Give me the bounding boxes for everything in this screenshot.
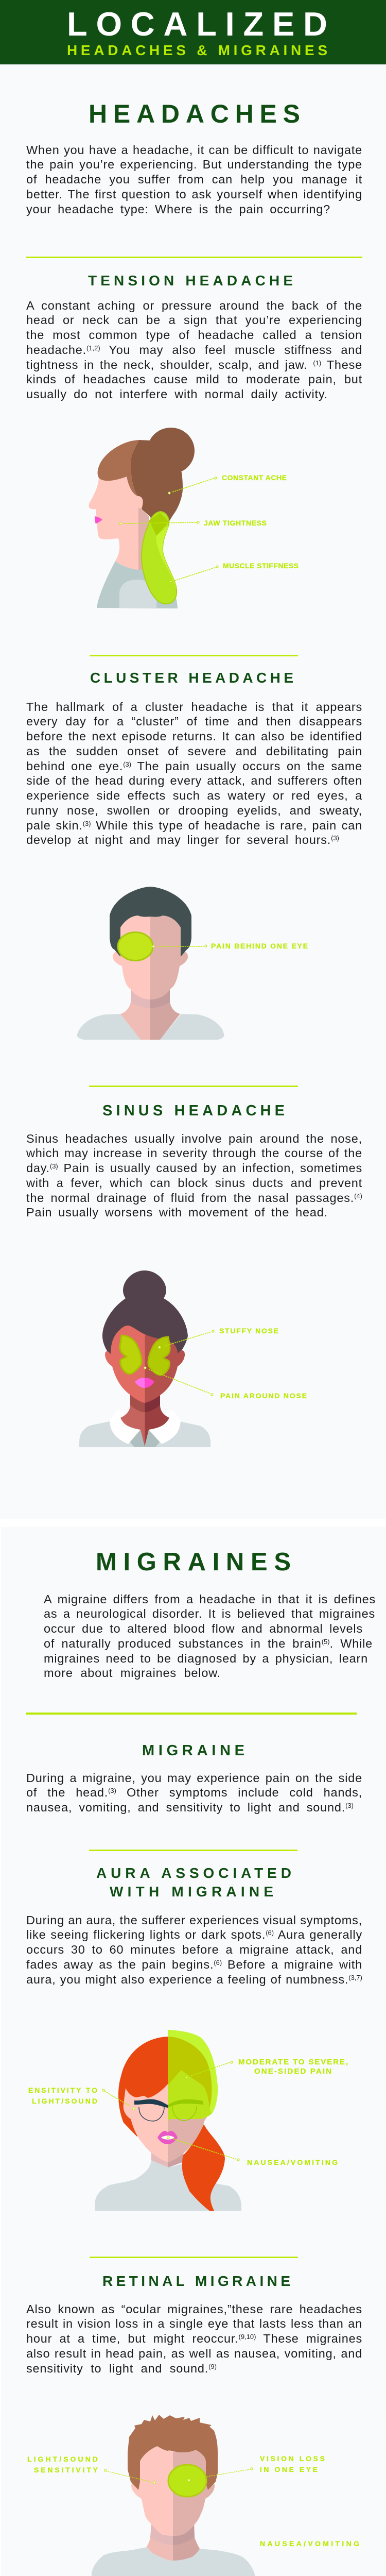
illustration: cluster headache man <box>77 887 308 1040</box>
glasses left <box>134 2099 168 2121</box>
text: aura: fades away as the pain begins.(6) Before a migraine with <box>26 1958 362 1971</box>
hair <box>131 428 195 536</box>
text: headaches intro: the pain you’re experiencing. But understanding the type <box>26 158 362 171</box>
glasses under pain area <box>168 2099 203 2121</box>
callout: sensitivity to light and sound: ENSITIVITY TO <box>28 2086 97 2094</box>
front hair <box>98 440 139 496</box>
shirt <box>97 561 178 608</box>
text: tension headache: A constant aching or pressure around the back of the <box>26 299 362 312</box>
text: migraines intro <box>44 1592 376 1680</box>
text: cluster headache: runny nose, swollen or drooping eyelids, and sweaty, <box>26 804 362 817</box>
text: sinus headache: Sinus headaches usually involve pain around the nose, <box>26 1132 362 1145</box>
illustration: retinal migraine man <box>27 2415 359 2576</box>
pain area: sinuses <box>120 1335 170 1375</box>
text: migraines intro: A migraine differs from a headache in that it is defines <box>44 1592 376 1606</box>
title banner <box>0 0 386 64</box>
face <box>124 2081 212 2162</box>
text: aura <box>26 1913 362 1986</box>
text: cluster headache: every day for a “cluster” of time and then disappears <box>26 715 362 728</box>
text: cluster headache <box>26 700 362 846</box>
text: retinal migraine: Also known as “ocular migraines,”these rare headaches <box>26 2302 362 2316</box>
text: cluster headache: behind one eye.(3) The pain usually occurs on the same <box>26 759 362 773</box>
callout: nausea and vomiting: NAUSEA/VOMITING <box>247 2158 338 2166</box>
pain area: one eye <box>168 2465 206 2497</box>
text: retinal migraine <box>26 2302 362 2375</box>
shirt <box>77 1014 224 1040</box>
text: aura: aura, you might also experience a feeling of numbness.(3,7) <box>26 1973 362 1986</box>
divider and heading: aura associated with migraine <box>89 1850 297 1899</box>
title banner: HEADACHES & MIGRAINES <box>67 42 327 58</box>
text: sinus headache: day.(3) Pain is usually caused by an infection, sometimes <box>26 1161 362 1175</box>
callout: light and sound sensitivity: SENSITIVITY <box>34 2466 98 2474</box>
title banner: LOCALIZED <box>67 5 327 43</box>
text: aura: occurs 30 to 60 minutes before a migraine attack, and <box>26 1943 362 1956</box>
shirt <box>79 1421 210 1447</box>
text: retinal migraine: result in vision loss in a single eye that lasts less than an <box>26 2317 362 2330</box>
text: migraines intro: migraines need to be diagnosed by a physician, learn <box>44 1652 368 1665</box>
callout: jaw tightness <box>119 519 267 527</box>
text: cluster headache: The hallmark of a cluster headache is that it appears <box>26 700 362 714</box>
pain area: one-sided head <box>168 2030 218 2122</box>
callout: vision loss in one eye: VISION LOSS <box>260 2454 325 2463</box>
callout: stuffy nose: STUFFY NOSE <box>219 1327 278 1335</box>
callout: muscle stiffness <box>170 562 299 582</box>
text: retinal migraine: sensitivity to light and sound.(9) <box>26 2362 217 2375</box>
divider and heading: cluster headache <box>90 655 298 685</box>
text: sinus headache <box>26 1132 362 1219</box>
text: tension headache <box>26 299 362 401</box>
neck <box>151 2153 184 2167</box>
ponytail <box>182 2124 225 2211</box>
text: tension headache: usually do not interfere with normal daily activity. <box>26 387 328 401</box>
collar <box>110 1410 181 1444</box>
neck <box>120 987 180 1040</box>
heading: headaches: HEADACHES <box>89 99 300 128</box>
pain area: neck muscle <box>142 512 177 604</box>
callout: light and sound sensitivity <box>27 2455 155 2484</box>
text: cluster headache: experience side effects such as watery or red eyes, a <box>26 789 362 802</box>
callout: vision loss in one eye <box>188 2454 325 2481</box>
callout: vision loss in one eye: IN ONE EYE <box>260 2465 318 2473</box>
text: tension headache: kinds of headaches cause mild to moderate pain, but <box>26 372 362 386</box>
back hair left <box>118 2037 168 2137</box>
divider and heading: aura associated with migraine: AURA ASSOCIATED <box>96 1865 291 1881</box>
hair <box>110 887 191 957</box>
lips <box>135 1378 154 1388</box>
callout: light and sound sensitivity: LIGHT/SOUND <box>27 2455 98 2463</box>
text: tension headache: headache.(1,2) You may also feel muscle stiffness and <box>26 343 362 357</box>
shirt <box>95 2160 241 2211</box>
text: cluster headache: as the sudden onset of severe and debilitating pain <box>26 744 362 758</box>
face <box>105 1326 185 1403</box>
callout: pain around nose <box>144 1367 307 1400</box>
text: headaches intro: better. The first question to ask yourself when identifying <box>26 188 362 201</box>
text: sinus headache: the normal drainage of fluid from the nasal passages.(4) <box>26 1191 362 1205</box>
shirt <box>92 2547 255 2576</box>
text: migraines intro: as a neurological disorder. It is believed that migraines <box>44 1607 375 1620</box>
text: cluster headache: side of the head during every attack, and sufferers often <box>26 774 362 787</box>
callout: constant ache <box>168 473 287 494</box>
callout: nausea and vomiting <box>167 2137 338 2166</box>
face <box>131 2446 215 2536</box>
text: aura: During an aura, the sufferer experiences visual symptoms, <box>26 1913 362 1927</box>
lips <box>95 516 102 524</box>
neck <box>120 1391 169 1446</box>
text: headaches intro <box>26 143 362 216</box>
text: sinus headache: with a fever, which can block sinus ducts and prevent <box>26 1176 362 1190</box>
callout: moderate to severe one-sided pain <box>186 2058 348 2078</box>
callout: constant ache: CONSTANT ACHE <box>222 473 287 482</box>
text: migraine <box>26 1771 362 1814</box>
text: migraines intro: more about migraines below. <box>44 1666 221 1680</box>
text: aura: like seeing flickering lights or dark spots.(6) Aura generally <box>26 1928 362 1941</box>
text: cluster headache: pale skin.(3) While this type of headache is rare, pain can <box>26 819 362 832</box>
text: tension headache: tightness in the neck, shoulder, scalp, and jaw. (1) These <box>26 358 362 371</box>
callout: pain behind one eye <box>152 942 308 950</box>
text: tension headache: the most common type of headache called a tension <box>26 328 362 342</box>
front hair left <box>126 2061 168 2098</box>
divider and heading: migraine <box>26 1713 357 1758</box>
text: retinal migraine: hour at a time, but might reoccur.(9,10) These migraines <box>26 2332 362 2345</box>
face <box>113 916 188 999</box>
hair <box>128 2415 218 2490</box>
divider and heading: tension headache: TENSION HEADACHE <box>88 273 293 289</box>
text: migraine: nausea, vomiting, and sensitivity to light and sound.(3) <box>26 1801 354 1814</box>
illustration: aura woman <box>28 2030 348 2211</box>
callout: pain around nose: PAIN AROUND NOSE <box>220 1392 307 1400</box>
text: sinus headache: which may increase in severity through the course of the <box>26 1146 362 1160</box>
callout: sensitivity to light and sound: LIGHT/SOUND <box>32 2097 97 2105</box>
text: headaches intro: of headache you suffer from can help you manage it <box>26 173 362 186</box>
text: retinal migraine: also result in head pain, as well as nausea, vomiting, and <box>26 2347 362 2360</box>
white strip and left margin <box>0 1519 386 2576</box>
callout: sensitivity to light and sound <box>28 2086 135 2110</box>
callout: moderate to severe one-sided pain: ONE-SIDED PAIN <box>254 2067 331 2076</box>
divider and heading: tension headache <box>26 257 362 289</box>
text: migraines intro: occur due to altered blood flow and abnormal levels <box>44 1622 363 1635</box>
pain area: one eye <box>118 933 153 960</box>
text: cluster headache: develop at night and may linger for several hours.(3) <box>26 833 339 846</box>
text: migraine: During a migraine, you may experience pain on the side <box>26 1771 362 1785</box>
text: headaches intro: your headache type: Where is the pain occurring? <box>26 202 330 216</box>
text: migraines intro: of naturally produced substances in the brain(5). While <box>44 1637 373 1650</box>
face and neck <box>89 477 149 570</box>
divider and heading: retinal migraine <box>90 2257 298 2289</box>
callout: pain behind one eye: PAIN BEHIND ONE EYE <box>211 942 308 950</box>
text: migraine: of the head.(3) Other symptoms include cold hands, <box>26 1786 362 1799</box>
callout: stuffy nose <box>159 1327 278 1348</box>
text: sinus headache: Pain usually worsens with movement of the head. <box>26 1206 328 1219</box>
divider and heading: sinus headache <box>89 1086 298 1117</box>
label: nausea and vomiting: NAUSEA/VOMITING <box>260 2539 359 2548</box>
neck <box>147 2524 200 2561</box>
text: tension headache: head or neck can be a sign that you’re experiencing <box>26 313 362 327</box>
callout: moderate to severe one-sided pain: MODERATE TO SEVERE, <box>238 2058 348 2066</box>
text: headaches intro: When you have a headache, it can be difficult to navigate <box>26 143 362 157</box>
lips <box>157 2131 178 2144</box>
callout: muscle stiffness: MUSCLE STIFFNESS <box>223 562 299 570</box>
illustration: tension headache woman <box>89 428 299 608</box>
text: cluster headache: before the next episode returns. It can also be identified <box>26 730 362 743</box>
callout: jaw tightness: JAW TIGHTNESS <box>204 519 267 527</box>
bun and hair <box>102 1270 188 1356</box>
illustration: sinus headache woman <box>79 1270 307 1447</box>
